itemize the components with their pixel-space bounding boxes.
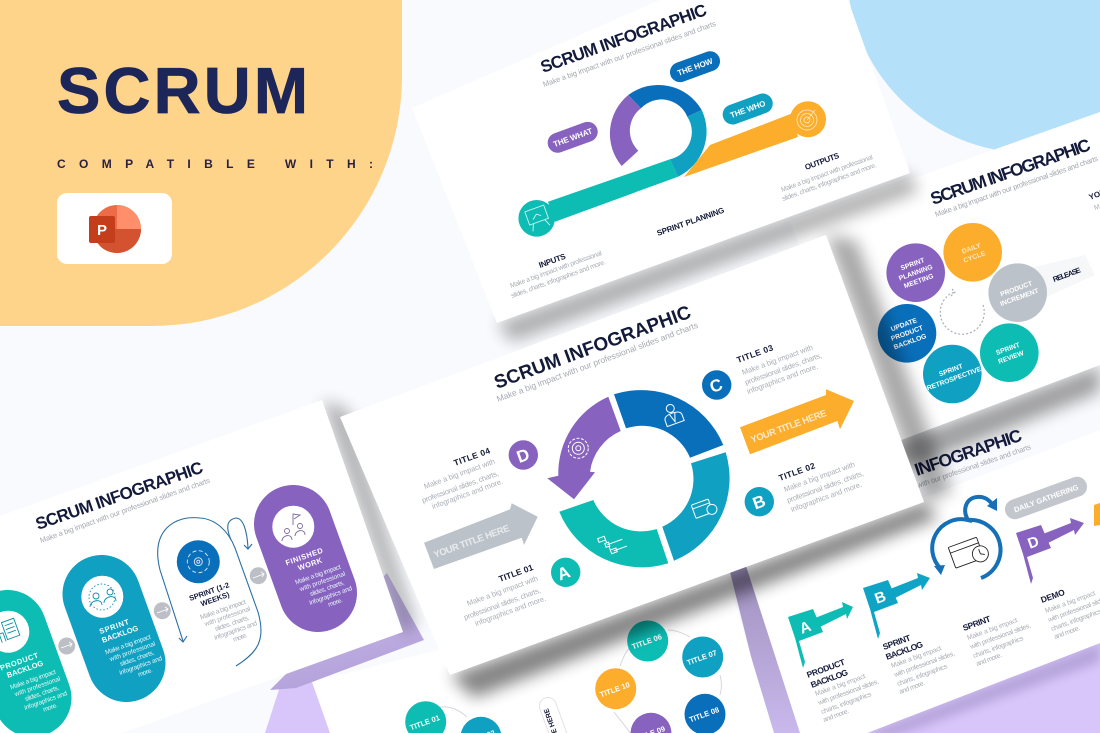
text block: title 04: infographics and more. — [431, 477, 504, 511]
pill: product backlog: BACKLOG — [6, 658, 45, 680]
pill: product backlog — [0, 611, 71, 723]
icon: PowerPoint logo: P — [97, 222, 107, 239]
pill: sprint backlog: Make a big impact — [104, 634, 152, 656]
pill: finished work: slides, charts, — [309, 579, 346, 598]
pill: product backlog: with professional — [13, 675, 62, 699]
text block: title 01 — [463, 562, 547, 628]
pill: the how — [667, 48, 723, 85]
arrow: your title here (orange) — [740, 389, 854, 454]
slide heading: SCRUM INFOGRAPHIC — [33, 458, 206, 534]
icon: flowchart — [598, 530, 628, 557]
orange flag, cropped — [1094, 503, 1100, 526]
slide heading: SCRUM INFOGRAPHIC — [538, 0, 709, 77]
circle: title 09 — [630, 713, 672, 733]
icon: team with flag — [282, 514, 305, 541]
circle: daily cycle — [943, 223, 1002, 282]
label: sprint backlog: charts, infographics — [896, 663, 949, 688]
label: inputs: Make a big impact with professional — [509, 250, 603, 290]
circle: sprint retrospective: RETROSPECTIVE — [926, 366, 983, 392]
label: product backlog: and more. — [822, 708, 850, 724]
circle: daily cycle: DAILY — [961, 242, 982, 256]
release arrow: RELEASE — [1052, 266, 1082, 284]
badge A: A — [555, 562, 573, 584]
label: sprint backlog: Make a big impact — [890, 645, 943, 670]
pill: the who: THE WHO — [729, 99, 767, 120]
label: sprint: charts, infographics — [972, 635, 1025, 660]
compatible with label: COMPATIBLE WITH: — [57, 157, 373, 171]
badge B: B — [750, 491, 768, 513]
donut segment: teal blue — [662, 452, 730, 561]
main title: SCRUM — [57, 54, 308, 127]
badge A — [551, 558, 580, 587]
arrow button 3 — [250, 567, 267, 584]
circle: product increment — [988, 263, 1047, 322]
icon: team — [89, 584, 116, 610]
label: product backlog: PRODUCT — [805, 657, 847, 680]
label: sprint: and more. — [975, 652, 1003, 668]
circle: update product backlog: UPDATE — [890, 317, 919, 333]
pill: finished work: FINISHED — [284, 546, 325, 567]
pill: sprint: Make a big impact — [199, 599, 247, 621]
pill: product backlog: PRODUCT — [0, 651, 40, 673]
circle: title 10 — [595, 668, 636, 709]
pill: sprint: infographics and — [213, 620, 258, 642]
label: sprint backlog: with professional slides, — [892, 650, 956, 679]
flag D: D — [1025, 533, 1042, 553]
pill: the what — [545, 119, 601, 156]
badge D — [509, 440, 538, 470]
circle: sprint planning meeting: MEETING — [903, 273, 935, 290]
pill: sprint: WEEKS) — [199, 590, 231, 608]
arrow button 2 — [154, 602, 171, 619]
circle: sprint retrospective — [923, 345, 983, 403]
label: outputs: OUTPUTS — [804, 151, 841, 172]
circle: sprint review: SPRINT — [995, 342, 1022, 357]
donut segment: blue — [614, 390, 723, 458]
flag B — [863, 573, 930, 639]
text block: title 02: TITLE 02 — [777, 460, 817, 483]
label: demo: Make a big impact — [1044, 590, 1097, 615]
label: sprint: Make a big impact — [966, 617, 1019, 642]
label: sprint — [961, 613, 1032, 668]
label: sprint planning: SPRINT PLANNING — [656, 206, 726, 238]
pill: sprint — [177, 540, 261, 653]
icon: presentation board — [525, 205, 551, 232]
label: inputs: INPUTS — [538, 252, 568, 270]
label: sprint: SPRINT — [961, 613, 993, 633]
label: outputs: Make a big impact with professional — [780, 154, 874, 194]
circle: title 01 — [405, 701, 446, 733]
circle: sprint review: REVIEW — [997, 350, 1026, 366]
text block: title 01: Make a big impact with — [466, 574, 539, 608]
text block: title 04: TITLE 04 — [452, 445, 492, 468]
circle: title 06 — [627, 620, 668, 662]
circle: update product backlog: PRODUCT — [890, 324, 925, 343]
circle: product increment: PRODUCT — [1000, 280, 1034, 298]
slide: pill process (left) — [0, 400, 416, 733]
pill: the who — [720, 91, 776, 127]
sprint loop with calendar icon — [932, 497, 1001, 578]
arrow button 1 — [58, 638, 75, 654]
icon: target — [797, 110, 817, 130]
slide heading: Make a big impact with our professional slides and charts — [39, 476, 211, 545]
pill: product backlog: more. — [42, 702, 59, 714]
vertical pill label — [537, 695, 574, 733]
icon: gear — [568, 438, 588, 458]
text block: title 03: TITLE 03 — [735, 342, 775, 365]
icon: gear — [187, 551, 209, 573]
lavender backdrop shapes — [265, 560, 1100, 733]
arrow: your title here (gray): YOUR TITLE HERE — [432, 523, 511, 561]
donut segment: purple arrow — [547, 397, 621, 499]
icon: board — [0, 618, 20, 643]
pill: product backlog: infographics and — [23, 690, 69, 712]
circle: title 08: TITLE 08 — [688, 705, 720, 724]
label: product backlog: charts, infographics — [820, 691, 873, 716]
flag A — [788, 602, 853, 668]
icon: calendar clock — [691, 497, 718, 520]
text block: title 01: TITLE 01 — [497, 562, 535, 584]
pill: finished work — [272, 506, 356, 617]
text block: title 03: professional slides, charts, — [744, 351, 823, 387]
pill: sprint backlog — [81, 576, 166, 687]
pill: sprint: SPRINT (1-2 — [188, 580, 230, 603]
flag B: B — [872, 588, 889, 608]
release arrow — [1030, 255, 1095, 300]
label: demo: and more. — [1053, 625, 1081, 641]
slide heading: SCRUM INFOGRAPHIC — [928, 135, 1093, 209]
text block: title 04: Make a big impact with — [423, 457, 496, 491]
pill: sprint backlog: infographics and — [118, 655, 164, 677]
arrow: your title here (orange): YOUR TITLE HERE — [749, 408, 828, 446]
pill: finished work: more. — [327, 597, 344, 609]
cropped label — [1088, 185, 1100, 212]
arrow: your title here (gray) — [424, 503, 538, 569]
slide heading: Make a big impact with our professional slides and charts — [934, 154, 1099, 219]
shadow cast by hexagon slide — [880, 365, 1100, 472]
slide heading: Make a big impact with our professional slides and charts — [495, 320, 699, 404]
label: product backlog: Make a big impact — [814, 673, 867, 698]
slide: hexagon cycle (right) — [790, 112, 1100, 448]
circle: sprint planning meeting: PLANNING — [898, 264, 934, 283]
circle: title 01: TITLE 01 — [409, 713, 441, 732]
slide heading: Make a big impact with our professional slides and charts — [542, 19, 717, 89]
text block: title 03: infographics and more. — [746, 362, 819, 396]
dashed cycle arrow — [940, 289, 984, 334]
circle: update product backlog — [878, 304, 936, 363]
pill: finished work: WORK — [297, 556, 324, 573]
circle: sprint retrospective: SPRINT — [938, 363, 965, 378]
teal input band — [518, 159, 678, 237]
blue circle decoration — [847, 0, 1100, 153]
text block: title 02: professional slides, charts, — [786, 469, 865, 505]
label: product backlog: with professional slides, — [816, 678, 880, 707]
orange output band — [684, 101, 826, 177]
badge C — [702, 370, 731, 400]
label: product backlog — [805, 657, 880, 724]
flag D — [1016, 518, 1084, 584]
flag A: A — [797, 618, 814, 638]
pill: sprint backlog: BACKLOG — [101, 623, 140, 645]
pill: product backlog: slides, charts, — [24, 684, 61, 703]
circle: sprint planning meeting: SPRINT — [900, 257, 926, 272]
text block: title 02 — [777, 460, 865, 514]
label: outputs: slides, charts, infographics and more. — [781, 162, 878, 203]
sprint loop outline — [158, 518, 261, 666]
label: sprint: with professional slides, — [968, 622, 1032, 651]
pill: product backlog: Make a big impact — [9, 669, 57, 691]
slide heading: INFOGRAPHIC — [912, 425, 1025, 480]
text block: title 03: Make a big impact with — [741, 343, 814, 377]
label: demo: DEMO — [1039, 587, 1067, 605]
text block: title 02: Make a big impact with — [783, 460, 856, 494]
donut segment: green — [559, 500, 668, 567]
daily gathering pill: DAILY GATHERING — [1013, 483, 1080, 514]
pill: finished work: Make a big impact — [294, 564, 342, 586]
pill: sprint: slides, charts, — [214, 614, 250, 633]
PowerPoint badge — [57, 193, 172, 264]
pill: sprint backlog: with professional — [108, 640, 157, 664]
pill: sprint backlog: more. — [137, 667, 154, 679]
circle: title 02 — [460, 717, 502, 733]
orange corner panel — [0, 0, 402, 326]
text block: title 03 — [735, 342, 823, 396]
icon: person — [660, 402, 684, 427]
text block: title 04: professional slides, charts, — [421, 469, 500, 505]
pill: sprint: more. — [232, 632, 249, 644]
pill: finished work: infographics and — [308, 585, 354, 607]
circle: update product backlog: BACKLOG — [893, 333, 928, 351]
circle: daily cycle: CYCLE — [963, 250, 987, 265]
pill: sprint: with professional — [203, 605, 252, 629]
label: sprint backlog: and more. — [898, 680, 926, 696]
circle: product increment: INCREMENT — [999, 287, 1041, 308]
circle: title 06: TITLE 06 — [631, 632, 663, 651]
text block: title 01: infographics and more. — [474, 594, 547, 628]
circle: title 07 — [682, 636, 723, 678]
arrows between circles — [440, 630, 722, 733]
circle: title 07: TITLE 07 — [686, 648, 718, 667]
slide heading: with our professional slides and charts — [915, 442, 1032, 490]
badge C: C — [707, 375, 725, 397]
slide: circles of titles (bottom) — [312, 577, 774, 733]
circle: title 08 — [684, 694, 726, 733]
label: sprint backlog: SPRINT — [881, 632, 913, 652]
label: inputs: slides, charts, infographics and more. — [510, 259, 607, 300]
badge B — [745, 487, 774, 516]
circle: sprint review — [980, 323, 1039, 382]
slide: sprint planning (top) — [412, 0, 918, 342]
circle: sprint planning meeting — [886, 243, 945, 302]
pill: sprint backlog: slides, charts, — [119, 649, 156, 668]
label: demo — [1039, 587, 1100, 641]
text block: title 02: infographics and more. — [790, 480, 863, 514]
pill: sprint backlog: SPRINT — [98, 617, 131, 636]
label: sprint backlog: BACKLOG — [884, 639, 925, 662]
daily gathering pill — [1002, 474, 1090, 522]
label: product backlog: BACKLOG — [809, 667, 850, 690]
slide heading: SCRUM INFOGRAPHIC — [491, 302, 694, 394]
pill: the what: THE WHAT — [552, 126, 594, 149]
loop arc segments — [610, 85, 707, 177]
slide: timeline flags (lower right) — [746, 365, 1100, 733]
text block: title 04 — [421, 445, 504, 511]
circle: title 10: TITLE 10 — [599, 680, 631, 699]
slide: central donut — [340, 235, 952, 698]
pill: finished work: with professional — [298, 570, 347, 594]
text block: title 01: professional slides, charts, — [463, 586, 542, 622]
label: sprint backlog — [881, 632, 956, 696]
pill: the how: THE HOW — [676, 56, 715, 78]
badge D: D — [514, 445, 532, 467]
